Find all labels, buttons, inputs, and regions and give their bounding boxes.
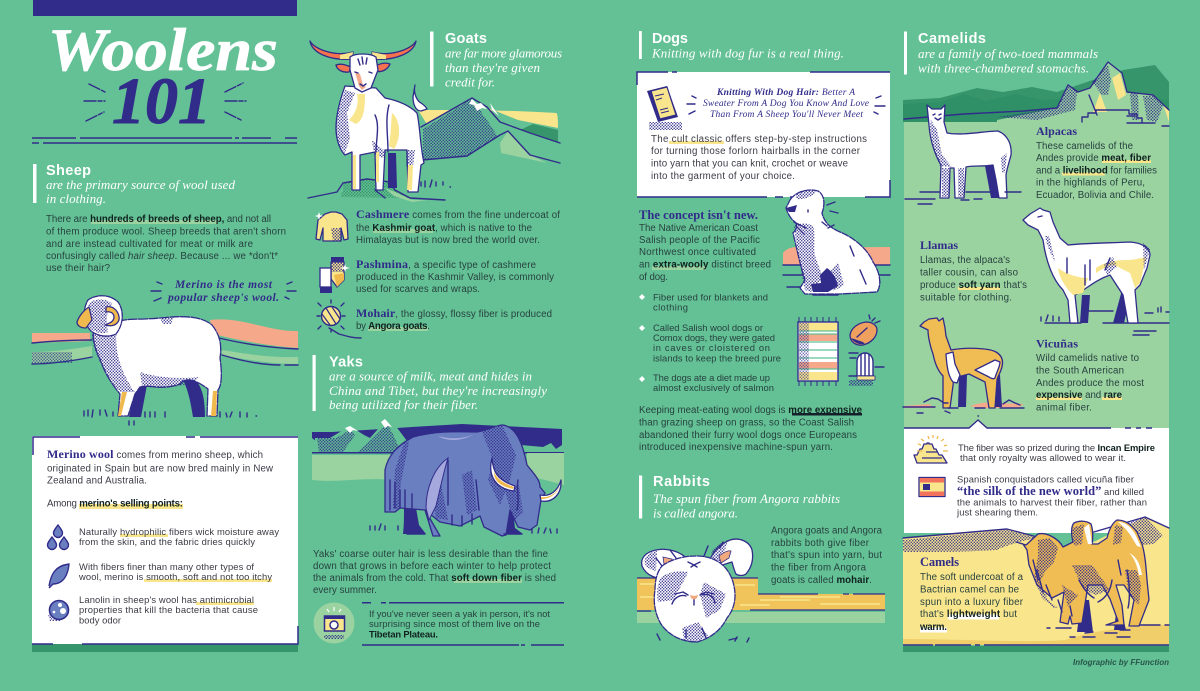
callout: yak tibetan plateau: Tibetan Plateau.	[369, 628, 438, 640]
icon: book	[647, 86, 682, 130]
text: mohair: by Angora goats.	[356, 321, 430, 332]
callout: yak tibetan plateau: surprising since most of them live on the	[369, 618, 540, 629]
text: llamas: taller cousin, can also	[920, 268, 1018, 278]
header: yaks: China and Tibet, but they're increasingly	[329, 383, 547, 398]
title divider lines	[32, 138, 297, 143]
text: yaks body: every summer.	[313, 585, 377, 596]
bullets: salish dogs: The dogs ate a diet made up	[653, 372, 770, 383]
icon: lanolin ball	[48, 600, 68, 621]
header: dogs: Knitting with dog fur is a real thing.	[651, 46, 844, 60]
text: silk of the new world: Spanish conquistadors called vicuña fiber	[957, 474, 1134, 484]
icon: mohair yarn ball	[317, 300, 361, 338]
text: silk of the new world: just shearing them.	[956, 506, 1038, 518]
text: vicunas: the South American	[1036, 366, 1124, 376]
text: yaks body: Yaks' coarse outer hair is less desirable than the fine	[313, 549, 548, 560]
text: alpacas: Alpacas	[1036, 124, 1077, 138]
text: smooth: wool, merino is smooth, soft and not too itchy	[78, 571, 272, 582]
bullets: salish dogs: clothing	[653, 302, 688, 313]
text: vicunas: Vicuñas	[1036, 336, 1078, 350]
text: merino description: originated in Spain but are now bred mainly in New	[47, 464, 274, 474]
text: llamas: Llamas, the alpaca's	[920, 255, 1010, 266]
text: book description: into yarn that you can knit, crochet or weave	[651, 158, 848, 170]
header: camelids: Camelids	[918, 31, 986, 47]
text: alpacas: These camelids of the	[1036, 141, 1133, 152]
text: the concept isn't new: The Native American Coast	[639, 223, 758, 234]
header: rabbits: is called angora.	[653, 506, 738, 520]
bullets: salish dogs: almost exclusively of salmon	[653, 382, 774, 393]
text: silk of the new world: “the silk of the new world” and killed	[957, 484, 1144, 498]
text: rabbits: rabbits both give fiber	[771, 538, 870, 549]
text: llamas	[920, 238, 1027, 304]
header: goats	[430, 31, 562, 90]
text: mohair: Mohair, the glossy, flossy fiber is produced	[356, 306, 552, 320]
icon: feather	[49, 564, 69, 588]
text: incan empire: The fiber was so prized during the Incan Empire	[958, 442, 1155, 453]
bullets: salish dogs: Fiber used for blankets and	[653, 292, 768, 303]
header: rabbits	[639, 474, 840, 520]
text: rabbits: goats is called mohair.	[771, 575, 872, 586]
text: book title	[687, 88, 885, 120]
header: camelids	[904, 31, 1098, 76]
text: book description: into the garment of your choice.	[651, 171, 795, 182]
text: sheep intro: confusingly called hair sheep. Because ... we *don't*	[46, 251, 278, 262]
text: merino description: Zealand and Australia.	[47, 476, 147, 486]
text: the concept isn't new: The concept isn't new.	[639, 208, 758, 222]
text: pashmina: produced in the Kashmir Valley, is commonly	[356, 272, 554, 283]
text: keeping wool dogs: abandoned their furry wool dogs once Europeans	[639, 430, 857, 441]
header: yaks: being utilized for their fiber.	[329, 397, 478, 412]
text: cashmere: Cashmere comes from the fine undercoat of	[356, 207, 560, 221]
bullets: salish dogs: Comox dogs, they were gated	[653, 332, 775, 343]
text: camels: Bactrian camel can be	[920, 584, 1019, 596]
illustration: yak	[312, 419, 564, 536]
icon: dog house	[849, 353, 884, 386]
panel: knitting with dog hair book	[637, 72, 890, 197]
bullets: salish dogs: Called Salish wool dogs or	[653, 322, 763, 333]
illustration: alpaca	[905, 105, 1021, 204]
header: camelids: are a family of two-toed mammals	[918, 46, 1098, 61]
text: vicunas: animal fiber.	[1036, 402, 1092, 414]
header: dogs: Dogs	[652, 31, 688, 47]
title: Woolens 101: 101	[112, 65, 211, 138]
text: vicunas: Andes produce the most	[1036, 378, 1144, 389]
text: vicunas: Wild camelids native to	[1036, 353, 1139, 364]
header: goats: credit for.	[445, 74, 495, 90]
text: keeping wool dogs: introduced inexpensive machine-spun yarn.	[639, 442, 833, 453]
callout: yak tibetan plateau: If you've never seen a yak in person, it's not	[369, 608, 550, 619]
text: cashmere: Himalayas but is now bred the world over.	[356, 235, 540, 246]
header: sheep	[33, 163, 236, 206]
text: vicunas: expensive and rare	[1036, 390, 1123, 401]
icon: cashmere sweater	[315, 212, 348, 241]
text: yaks body: down that grows in before each winter to help protect	[313, 561, 551, 572]
text: vicunas	[1036, 336, 1144, 414]
text: rabbits	[771, 526, 883, 586]
text: smooth: With fibers finer than many other types of	[79, 561, 254, 572]
text: yaks body: the animals from the cold. That soft down fiber is shed	[313, 573, 556, 584]
text: keeping wool dogs: Keeping meat-eating wool dogs is more expensive	[639, 405, 863, 416]
text: rabbits: Angora goats and Angora	[771, 526, 883, 536]
icon: salmon steak	[850, 315, 880, 345]
text: pashmina: Pashmina, a specific type of cashmere	[356, 257, 536, 271]
text: the concept isn't new	[639, 208, 771, 283]
illustration: camel	[1016, 520, 1149, 633]
text: the concept isn't new: of dog.	[639, 272, 668, 283]
text: alpacas: and a livelihood for families	[1036, 166, 1157, 176]
text: antimicrobial: body odor	[79, 614, 121, 626]
text: camels: that's lightweight but	[920, 609, 1017, 620]
bullets: salish dogs: in caves or cloistered on	[653, 342, 770, 353]
callout: merino	[151, 279, 296, 304]
credit: Infographic by FFunction	[1073, 658, 1169, 667]
text: book title: Knitting With Dog Hair: Better A	[716, 88, 855, 98]
icon: spain flag	[919, 478, 945, 496]
header: sheep: in clothing.	[46, 191, 106, 206]
text: smooth	[78, 561, 272, 582]
header: goats: than they're given	[445, 60, 540, 75]
text: camels: warm.	[919, 622, 947, 633]
text: antimicrobial: Lanolin in sheep's wool has antimicrobial	[79, 594, 254, 605]
text: hydrophilic: Naturally hydrophilic fibers wick moisture away	[79, 526, 279, 537]
text: merino description: Among merino's selling points:	[47, 498, 183, 510]
text: sheep intro: of them produce wool. Sheep breeds that aren't shorn	[46, 226, 286, 238]
text: llamas: suitable for clothing.	[920, 292, 1012, 304]
icon: pashmina scarf	[320, 257, 350, 293]
panel: camelids background	[903, 62, 1169, 429]
header: yaks: Yaks	[329, 354, 363, 370]
text: llamas: produce soft yarn that's	[920, 280, 1027, 291]
text: cashmere: the Kashmir goat, which is native to the	[356, 223, 532, 234]
bullets: salish dogs	[639, 292, 781, 393]
text: llamas: Llamas	[920, 238, 958, 252]
text: hydrophilic: from the skin, and the fabric dries quickly	[79, 536, 255, 547]
text: mohair	[356, 306, 552, 332]
text: book title: Sweater From A Dog You Know And Love	[703, 99, 869, 109]
text: pashmina: used for scarves and wraps.	[356, 284, 480, 295]
illustration: goat	[308, 41, 560, 202]
text: pashmina	[356, 257, 554, 295]
text: silk of the new world: the animals to harvest their fiber, rather than	[957, 496, 1147, 508]
text: antimicrobial: properties that kill the bacteria that cause	[79, 604, 258, 615]
text: antimicrobial	[79, 594, 258, 626]
header: goats: are far more glamorous	[445, 46, 562, 60]
text: sheep intro: use their hair?	[46, 263, 111, 274]
text: silk of the new world	[956, 474, 1147, 518]
text: sheep intro: There are hundreds of breeds of sheep, and not all	[46, 214, 271, 225]
text: book description: The cult classic offers step-by-step instructions	[651, 134, 867, 145]
header: rabbits: Rabbits	[653, 474, 710, 490]
text: camels	[919, 555, 1024, 633]
callout: merino: popular sheep's wool.	[167, 292, 279, 304]
text: cashmere	[356, 207, 560, 246]
bullets: salish dogs: islands to keep the breed pure	[653, 352, 781, 364]
illustration: dog	[783, 190, 890, 295]
header: sheep: Sheep	[46, 163, 91, 179]
header: sheep: are the primary source of wool used	[46, 177, 236, 192]
text: alpacas: in the highlands of Peru,	[1036, 178, 1145, 188]
header: goats: Goats	[445, 31, 487, 47]
text: keeping wool dogs: than grazing sheep on grass, so the Coast Salish	[639, 418, 854, 428]
icon: water drops	[48, 525, 68, 550]
text: keeping wool dogs	[639, 405, 863, 453]
text: rabbits: the fiber from Angora	[771, 562, 867, 574]
callout: merino: Merino is the most	[174, 279, 273, 291]
text: merino description	[47, 447, 274, 510]
text: incan empire	[958, 442, 1155, 463]
text: camels: spun into a luxury fiber	[920, 597, 1024, 608]
illustration: sheep	[32, 296, 298, 425]
header: dogs	[639, 31, 844, 60]
icon: inca pyramid	[914, 435, 948, 463]
text: sheep intro	[46, 214, 286, 274]
text: merino description: Merino wool comes from merino sheep, which	[47, 447, 263, 461]
text: book title: Than From A Sheep You'll Never Meet	[710, 110, 863, 120]
text: hydrophilic	[79, 526, 279, 547]
text: the concept isn't new: an extra-wooly distinct breed	[639, 260, 771, 270]
text: rabbits: that's spun into yarn, but	[771, 550, 882, 561]
illustration: vicuna	[903, 318, 1024, 416]
header: yaks	[312, 354, 547, 412]
text: the concept isn't new: Northwest once cultivated	[639, 247, 756, 258]
header: rabbits: The spun fiber from Angora rabbits	[653, 491, 840, 506]
panel: vicuna facts	[904, 420, 1169, 533]
text: sheep intro: and are instead cultivated for meat or milk are	[46, 239, 253, 250]
icon: woven blanket	[798, 317, 838, 386]
illustration: rabbit	[637, 539, 885, 642]
header: yaks: are a source of milk, meat and hides in	[329, 368, 532, 384]
text: alpacas: Ecuador, Bolivia and Chile.	[1036, 190, 1154, 201]
text: yaks body	[313, 549, 556, 596]
text: book description	[651, 134, 867, 182]
text: the concept isn't new: Salish people of the Pacific	[639, 235, 760, 246]
panel: camels	[903, 517, 1169, 652]
text: alpacas	[1036, 124, 1157, 201]
text: book description: for turning those forlorn hairballs in the corner	[651, 146, 861, 157]
title: Woolens 101	[48, 17, 278, 138]
text: camels: Camels	[920, 555, 959, 569]
illustration: llama	[1023, 208, 1169, 335]
panel: merino wool	[32, 436, 298, 652]
header: camelids: with three-chambered stomachs.	[918, 60, 1089, 76]
text: camels: The soft undercoat of a	[920, 572, 1024, 583]
callout: yak tibetan plateau	[362, 603, 564, 645]
text: alpacas: Andes provide meat, fiber	[1036, 153, 1151, 164]
icon: camera	[314, 602, 354, 644]
title: Woolens 101: Woolens	[48, 17, 278, 83]
text: incan empire: that only royalty was allowed to wear it.	[960, 452, 1126, 463]
top bar	[33, 0, 297, 16]
